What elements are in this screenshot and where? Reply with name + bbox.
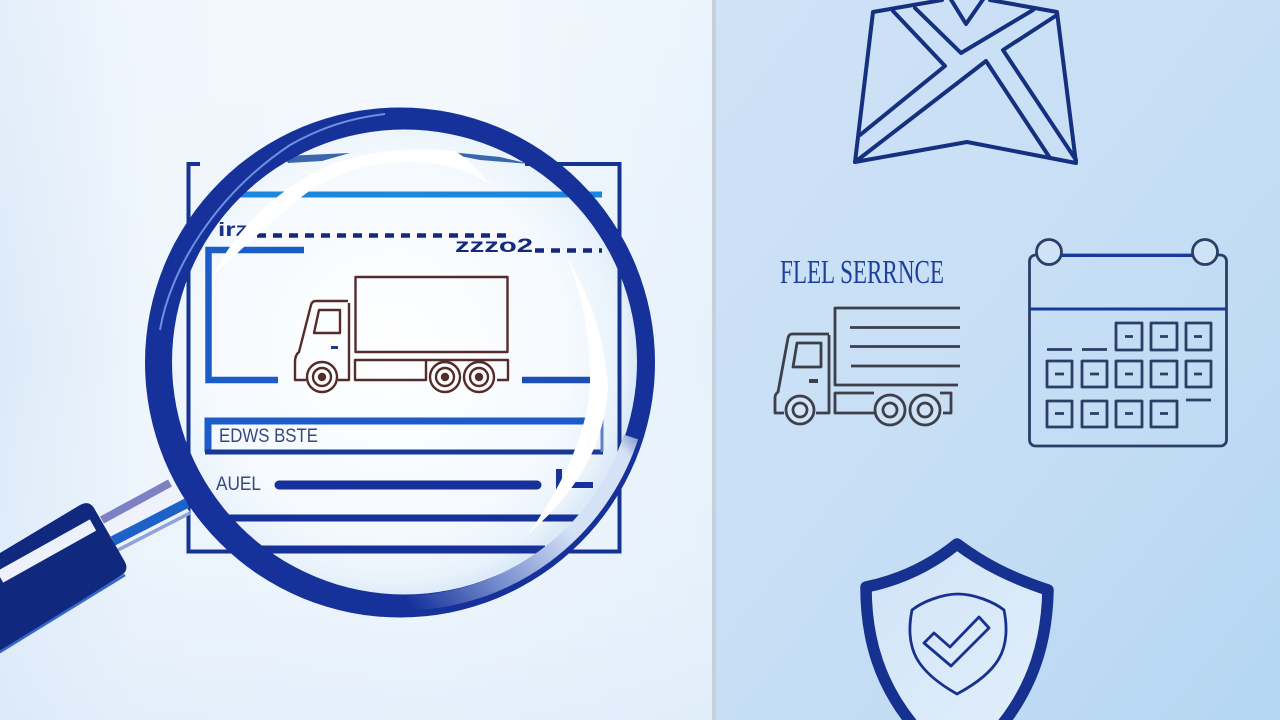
calendar rings	[1036, 240, 1062, 264]
shield inner	[910, 594, 1006, 694]
center divider	[712, 0, 716, 720]
dashed header line	[257, 233, 513, 238]
document outline	[188, 164, 620, 552]
icon: calendar	[1030, 240, 1226, 446]
fuel row	[216, 469, 593, 495]
icon: truck with lines	[775, 308, 960, 425]
panel: left background	[0, 0, 714, 720]
lens glare upper left	[213, 149, 492, 276]
form field box	[205, 418, 603, 452]
field text: EDWS BSTE	[219, 426, 318, 447]
label: fuel service: FLEL SERRNCE	[780, 254, 944, 291]
icon: truck in lens	[295, 277, 508, 392]
fuel row: AUEL	[216, 474, 261, 495]
image frame bracket right	[522, 377, 595, 383]
ring lower right glass band	[407, 437, 631, 603]
panel: right background	[714, 0, 1280, 720]
document behind magnifier	[188, 150, 620, 552]
form line two	[262, 546, 545, 552]
top accent bar	[235, 192, 602, 198]
icon: magnifying glass	[0, 108, 655, 653]
magnifier ring	[145, 108, 655, 618]
lens glare right	[528, 258, 608, 534]
calendar date cells	[1047, 323, 1211, 427]
calendar body	[1030, 255, 1226, 446]
form line one	[226, 514, 580, 522]
ring highlight	[160, 114, 385, 330]
magnifier shaft	[102, 482, 190, 552]
calendar header	[1030, 256, 1226, 309]
icon: map	[855, 0, 1076, 163]
glass lens fill	[162, 122, 642, 602]
dashed date line	[535, 248, 602, 253]
icon: shield	[866, 544, 1048, 720]
shield outer	[866, 544, 1048, 720]
magnifier handle	[0, 503, 126, 653]
image frame bracket left	[208, 250, 304, 380]
header scribble right: zzzo2	[455, 236, 533, 257]
shield check mark	[924, 617, 989, 666]
top edge smears	[284, 150, 530, 164]
header scribble left: irz/	[218, 220, 257, 241]
